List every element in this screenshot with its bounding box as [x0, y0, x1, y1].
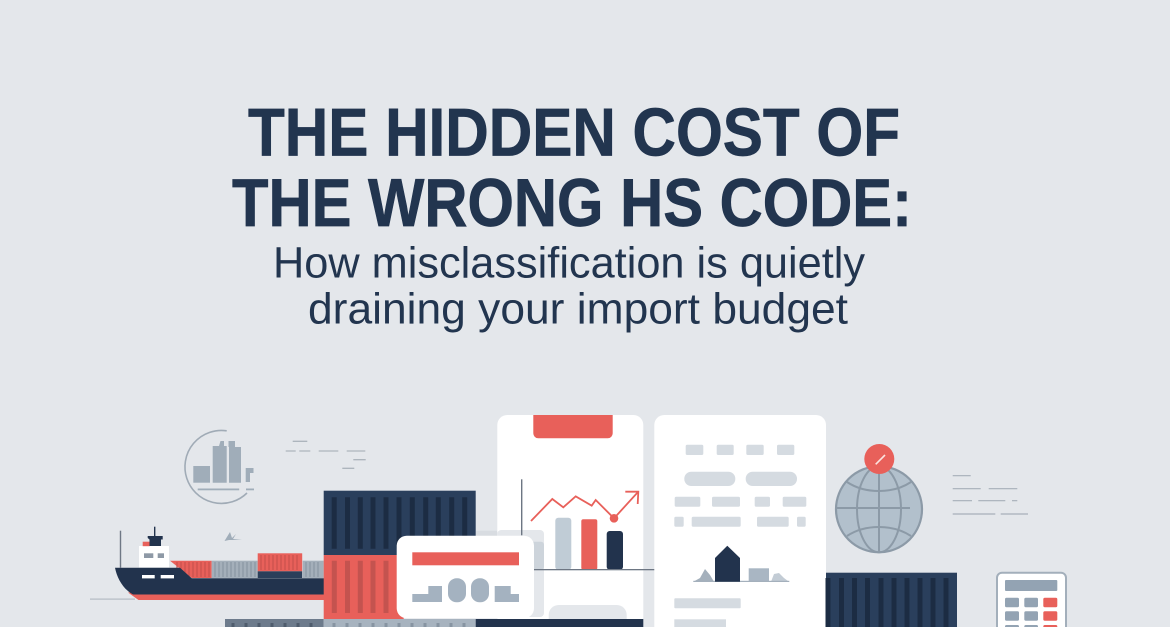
ship deck containers	[170, 553, 324, 578]
icon: bird	[224, 532, 242, 541]
card: phone with chart	[476, 415, 655, 627]
decorative dashes right: text lines	[953, 476, 1028, 514]
title: THE HIDDEN COST OF	[248, 94, 900, 170]
bottom container row	[225, 619, 643, 627]
trend line with arrow	[531, 492, 638, 523]
phone lower pill	[549, 605, 627, 627]
globe red pin	[864, 444, 894, 474]
ship bridge	[139, 527, 169, 568]
icon: globe	[836, 444, 922, 552]
water line	[90, 598, 135, 600]
document text placeholder rows	[674, 445, 806, 627]
title	[232, 94, 912, 241]
document skyline	[693, 546, 789, 582]
subtitle	[273, 240, 865, 334]
navy container, top of stack	[324, 491, 476, 555]
ship red waterline	[128, 592, 324, 600]
card: customs document	[654, 415, 826, 627]
small summary card	[397, 536, 534, 618]
icon: port skyline in circle	[185, 430, 254, 503]
title: THE WRONG HS CODE:	[232, 165, 912, 241]
decorative dashes left: wind lines	[286, 441, 366, 468]
container ship	[115, 527, 324, 600]
phone red tab	[533, 415, 613, 438]
bar chart	[497, 479, 655, 617]
navy container, right	[826, 573, 957, 627]
subtitle: How misclassification is quietly	[273, 240, 865, 288]
red container	[324, 555, 404, 619]
icon: calculator	[997, 573, 1066, 627]
ship hull	[115, 568, 324, 594]
subtitle: draining your import budget	[308, 286, 848, 334]
